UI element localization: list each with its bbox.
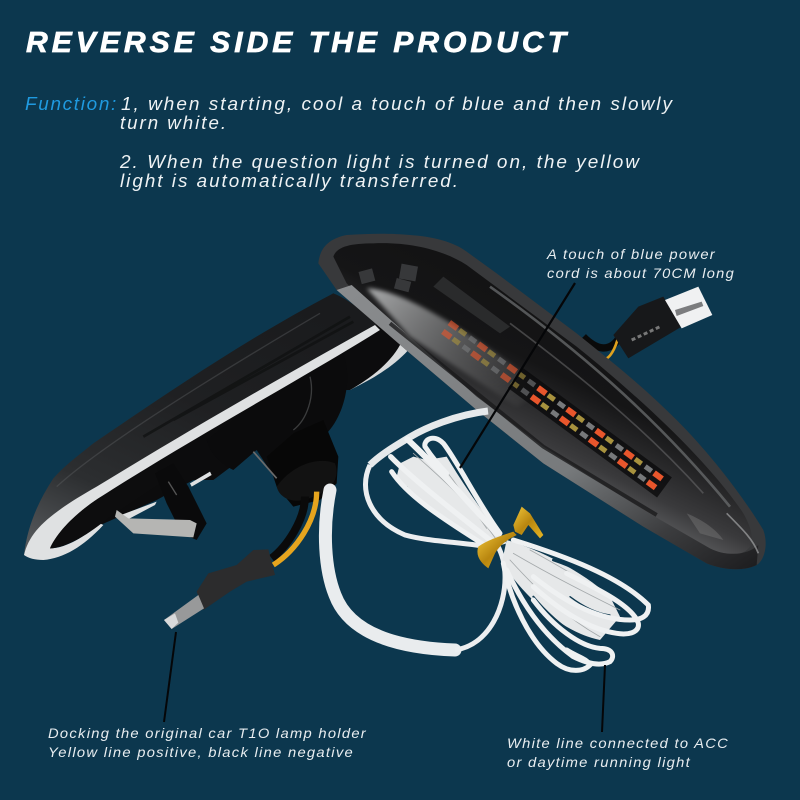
heat shrink <box>197 549 275 610</box>
leader line: power cord <box>460 283 575 468</box>
thin cord left loop <box>365 465 495 548</box>
strip backing <box>508 368 672 498</box>
lens top surface <box>24 293 377 557</box>
mounting dome <box>207 353 347 507</box>
left lamp (reverse side) <box>24 293 408 629</box>
far lower white rim <box>347 340 408 390</box>
upper highlight stripes <box>490 287 730 507</box>
function description <box>25 94 674 191</box>
leader line: white line <box>602 665 605 732</box>
rear wires <box>583 337 620 348</box>
right lamp (front side) <box>318 234 766 569</box>
upper lobe <box>397 457 507 548</box>
lower grey band <box>337 285 758 569</box>
end highlight <box>687 513 723 540</box>
LED strip <box>439 317 672 498</box>
function item 2: light is automatically transferred. <box>120 171 460 191</box>
strands <box>391 438 649 670</box>
rear dark body <box>40 293 402 550</box>
leader line: T10 holder <box>164 632 176 722</box>
function item 2: 2. When the question light is turned on, the yellow <box>119 152 641 172</box>
mounting post <box>155 463 207 540</box>
annotation: white line <box>507 736 729 770</box>
black wire <box>272 497 305 558</box>
function item 2 <box>119 152 641 191</box>
annotation: white line: or daytime running light <box>507 755 691 770</box>
lamp connector boot <box>613 297 682 358</box>
annotation: power cord: A touch of blue power <box>546 247 716 262</box>
function item 1: turn white. <box>120 113 228 133</box>
circuit board blocks <box>359 264 418 292</box>
yellow wire <box>273 492 317 565</box>
metal tip <box>164 595 204 629</box>
annotation: power cord: cord is about 70CM long <box>547 266 735 281</box>
metal clip <box>115 510 197 537</box>
bulb socket <box>267 420 338 507</box>
gold wire tie <box>477 507 543 568</box>
function label: Function: <box>25 94 118 114</box>
annotation: white line: White line connected to ACC <box>507 736 729 751</box>
sleeved cord from lamp <box>370 411 488 465</box>
lens ribs <box>143 317 353 437</box>
T10 plug <box>665 287 712 328</box>
thin cord lower loop <box>455 540 505 650</box>
title: REVERSE SIDE THE PRODUCT <box>26 27 570 59</box>
gaps between strands <box>407 487 610 633</box>
white gasket band <box>24 325 380 560</box>
function item 1: 1, when starting, cool a touch of blue and then slowly <box>121 94 674 114</box>
lower lobe <box>502 540 620 640</box>
strand shadow lines <box>400 453 627 637</box>
lamp outer shell <box>318 234 766 569</box>
white wire bundle <box>391 438 649 670</box>
annotation: T10 lamp holder: Docking the original car T1O lamp holder <box>48 726 367 741</box>
lamp inner lens <box>333 243 752 554</box>
annotation: T10 lamp holder: Yellow line positive, black line negative <box>48 745 354 760</box>
annotation: power cord <box>546 247 735 281</box>
lens glare <box>367 288 543 407</box>
annotation: T10 lamp holder <box>48 726 367 760</box>
thick white cord to holder <box>325 490 455 650</box>
function item 1 <box>120 94 674 133</box>
